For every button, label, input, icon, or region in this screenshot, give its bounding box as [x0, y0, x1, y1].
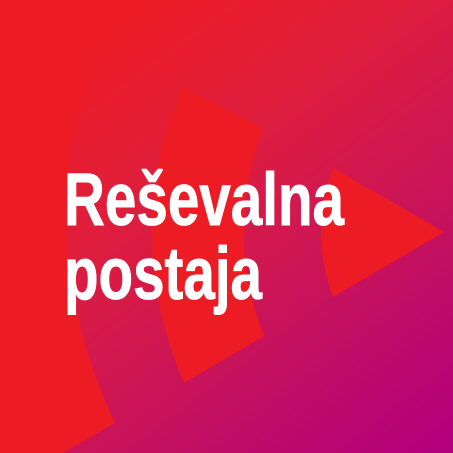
middle arc band	[151, 87, 264, 383]
triangle arrow head	[321, 168, 444, 297]
outer arc band	[0, 0, 115, 453]
title	[64, 158, 345, 315]
title line 1: Reševalna	[64, 158, 345, 241]
title line 2: postaja	[64, 232, 263, 315]
